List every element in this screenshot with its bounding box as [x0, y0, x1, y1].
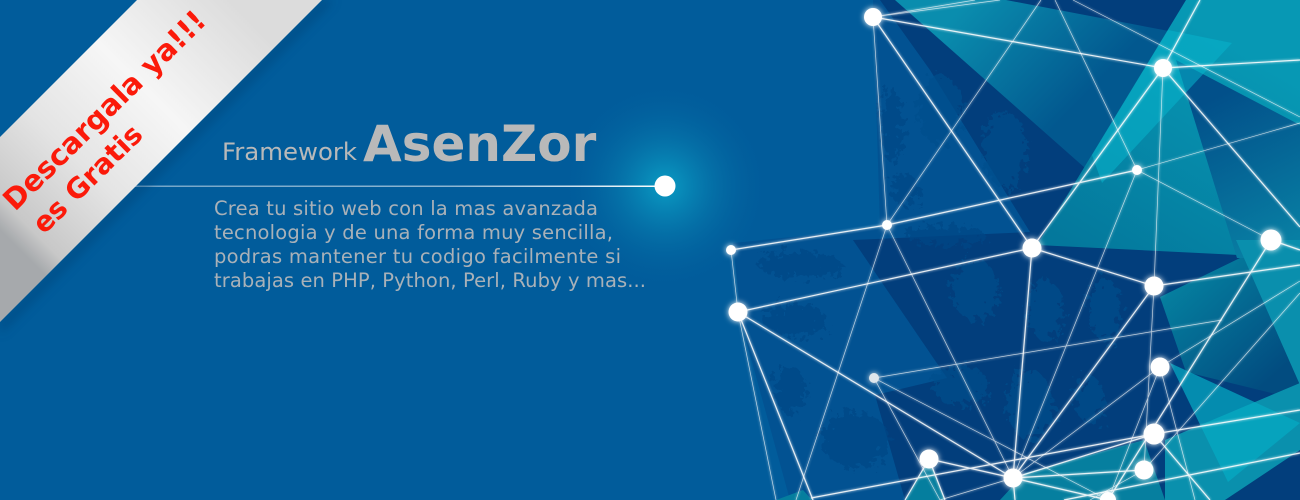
rule end node [654, 176, 676, 196]
network backdrop [733, 0, 1300, 500]
description: podras mantener tu codigo facilmente si [214, 245, 621, 268]
ribbon shadow [0, 0, 334, 334]
thin connection lines [731, 0, 1300, 500]
ribbon [0, 0, 322, 322]
teal polygons [776, 0, 1300, 500]
description: trabajas en PHP, Python, Perl, Ruby y mas... [214, 269, 646, 292]
horizontal rule [135, 186, 665, 187]
network nodes [726, 8, 1282, 500]
description: tecnologia y de una forma muy sencilla, [214, 221, 613, 244]
description [214, 197, 646, 292]
title [222, 115, 597, 173]
title: AsenZor [363, 115, 597, 173]
ribbon text: es Gratis [26, 118, 149, 240]
glow behind node [560, 81, 770, 291]
thick connection lines [731, 0, 1300, 500]
description: Crea tu sitio web con la mas avanzada [214, 197, 598, 220]
ribbon text: Descargala ya!!! [0, 3, 213, 217]
title: Framework [222, 137, 358, 166]
